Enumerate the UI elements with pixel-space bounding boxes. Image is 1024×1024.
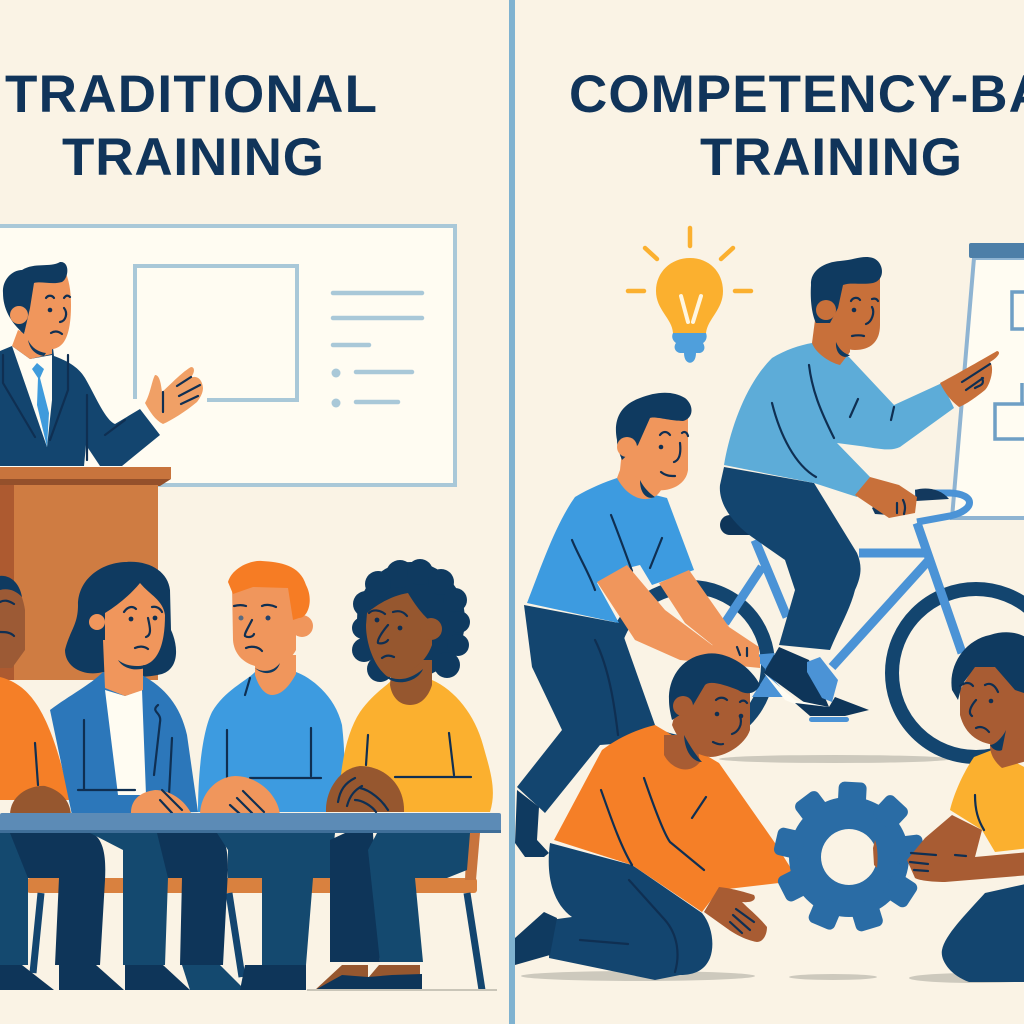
- heading: competency-based training: TRAINING: [700, 128, 962, 187]
- podium: [0, 467, 171, 680]
- person in blue tee: [515, 393, 760, 857]
- bicycle: [612, 489, 1024, 757]
- person in yellow shirt: [873, 632, 1024, 982]
- chair bench: [27, 833, 482, 990]
- audience member two: [50, 562, 245, 990]
- panel: competency-based training: [515, 65, 1024, 983]
- person on bicycle: [720, 257, 999, 722]
- icon: gear: [773, 781, 925, 933]
- table: [0, 813, 501, 991]
- icon: light bulb: [628, 228, 751, 363]
- flip chart: [952, 243, 1024, 518]
- audience member one: [0, 575, 124, 990]
- audience member three: [198, 561, 344, 990]
- heading: traditional training: TRADITIONAL: [5, 65, 377, 124]
- whiteboard: [0, 226, 455, 485]
- panel: traditional training: [0, 65, 501, 991]
- person in orange sweater: [515, 653, 792, 980]
- floor shadows: [521, 755, 1024, 983]
- audience member four: [315, 559, 493, 990]
- presenter: [0, 262, 203, 466]
- heading: traditional training: TRAINING: [62, 128, 324, 187]
- divider: [509, 0, 515, 1024]
- heading: competency-based training: [569, 65, 1024, 187]
- heading: traditional training: [5, 65, 377, 187]
